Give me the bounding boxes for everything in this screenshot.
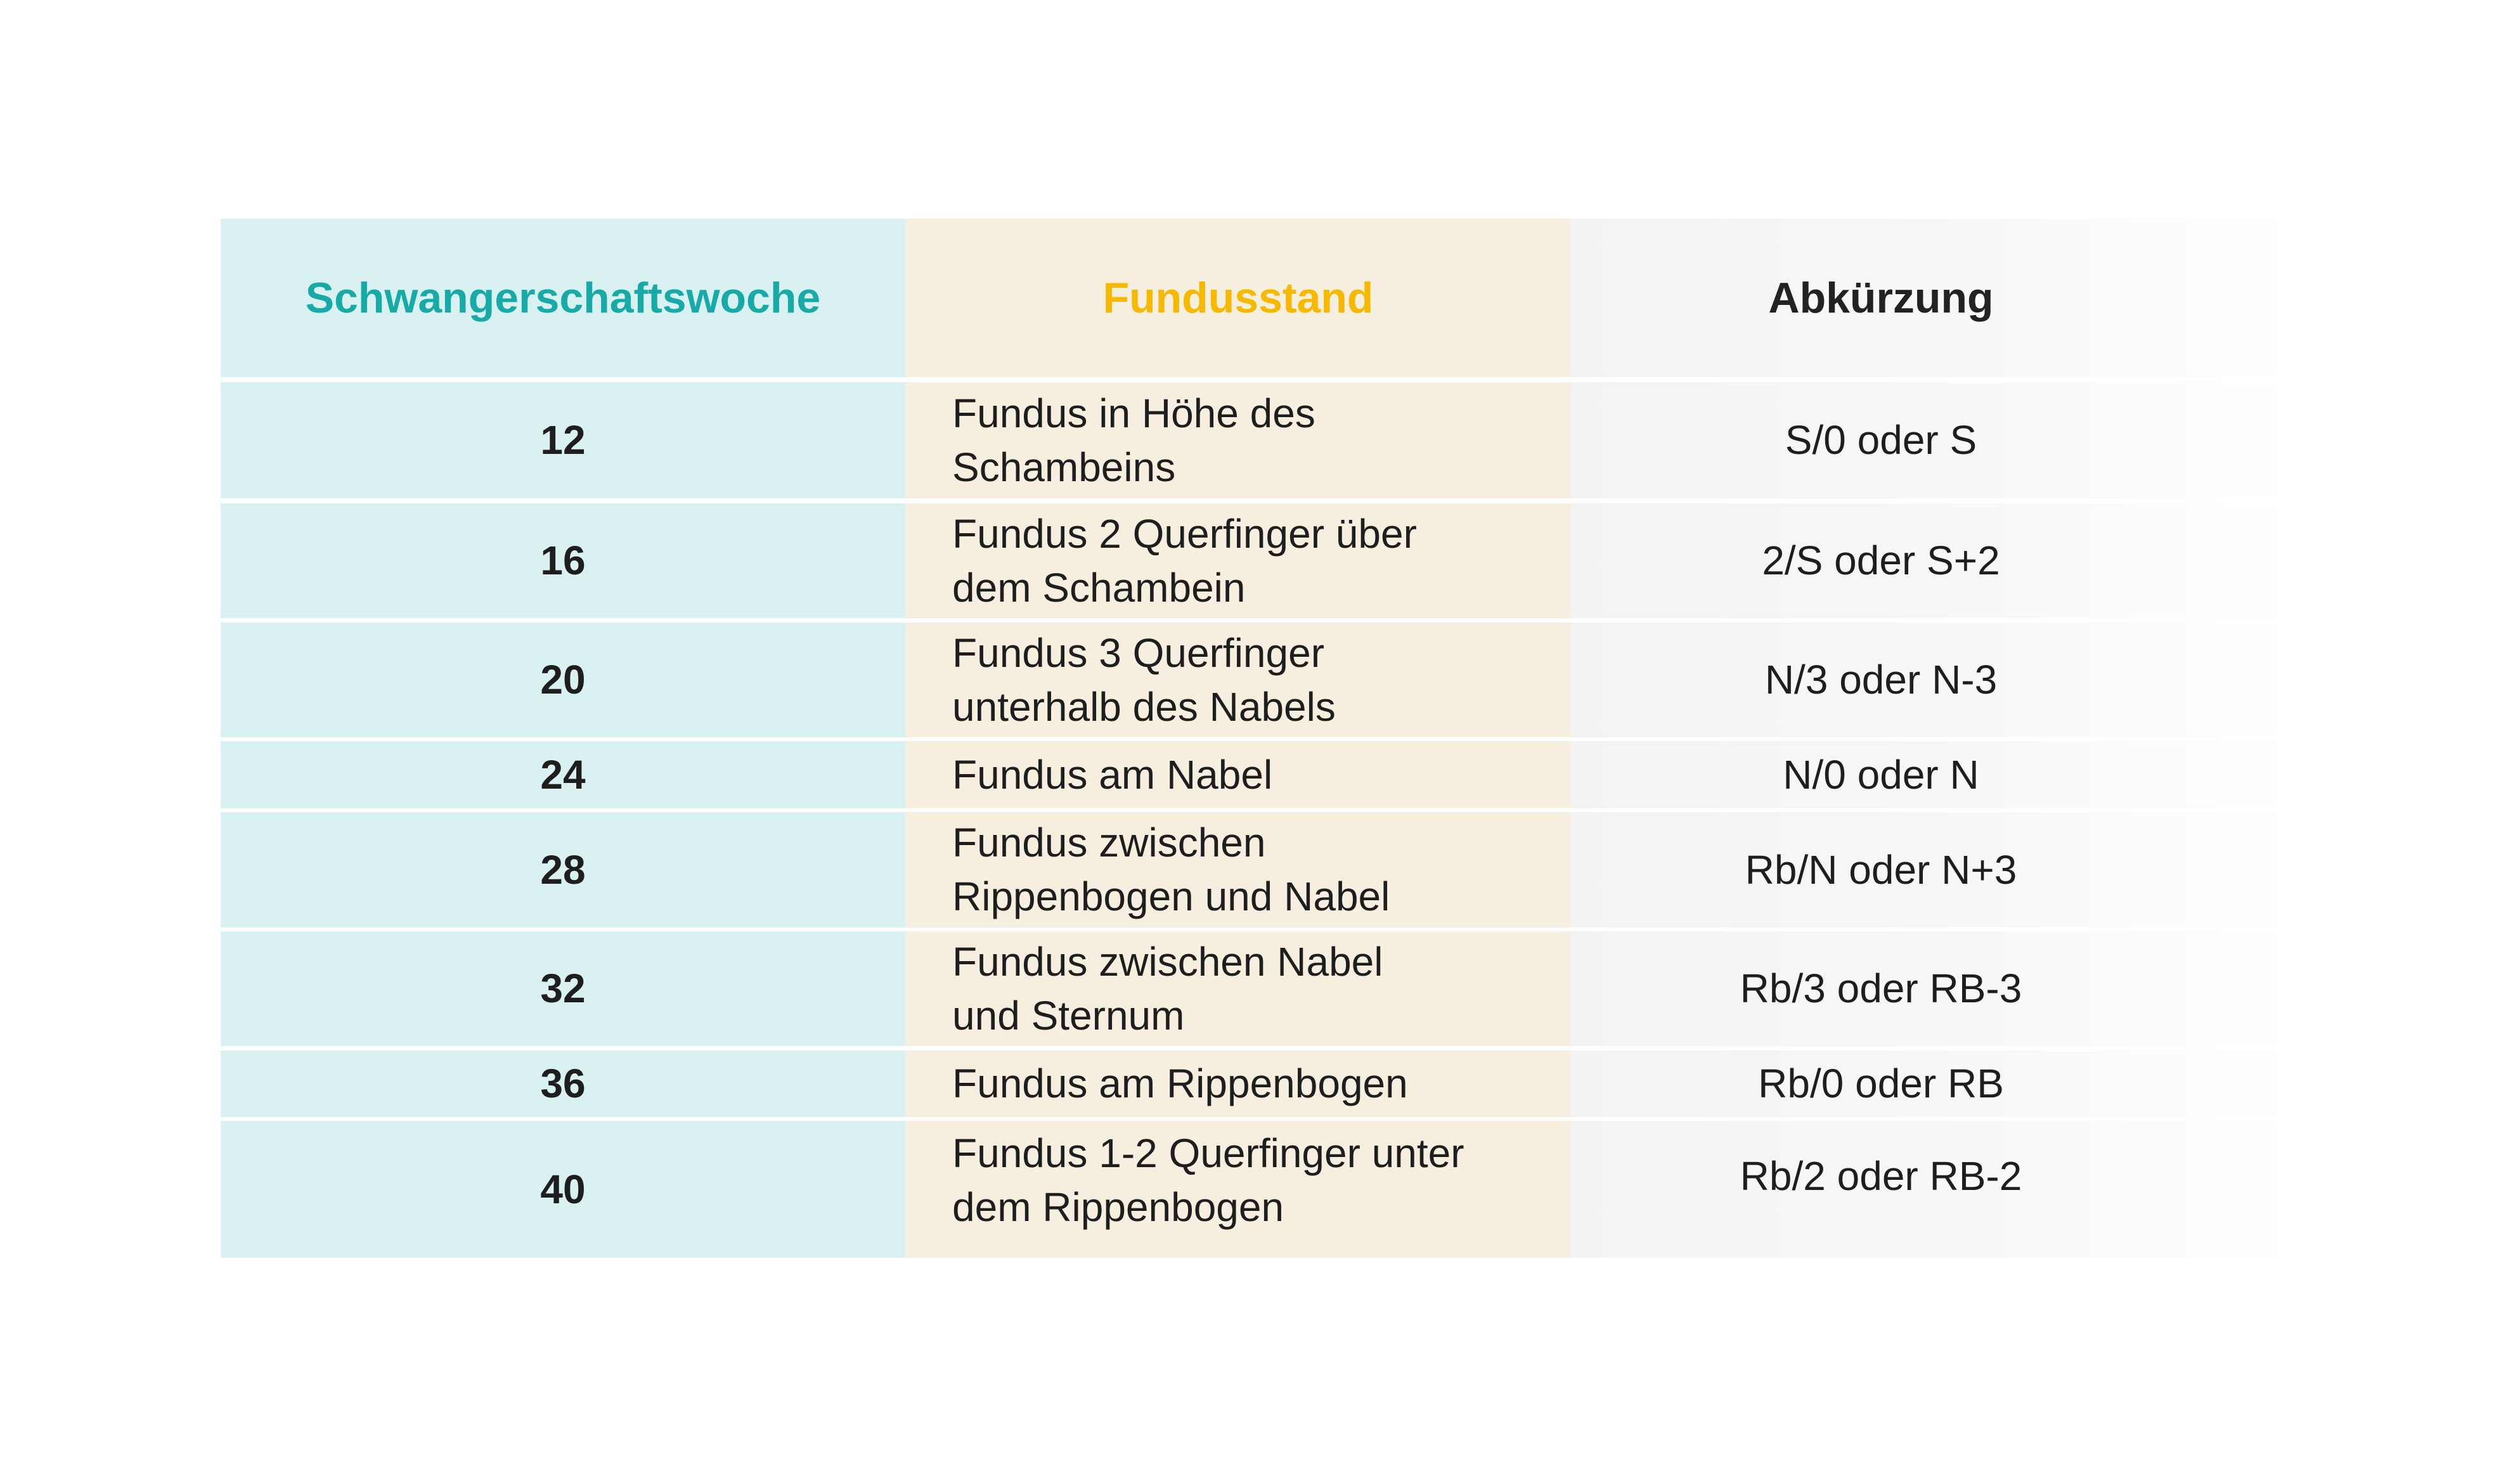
row 16: dem Schambein xyxy=(952,564,1245,610)
row 32: und Sternum xyxy=(952,993,1184,1038)
row 32 xyxy=(221,931,2022,1046)
row 16: 16 xyxy=(540,538,586,583)
row 28: Rippenbogen und Nabel xyxy=(952,874,1390,919)
row 20 xyxy=(221,623,1997,737)
row 36: Rb/0 oder RB xyxy=(1758,1061,2004,1106)
row 20: unterhalb des Nabels xyxy=(952,683,1336,729)
row 12: 12 xyxy=(540,417,586,463)
row 16: 2/S oder S+2 xyxy=(1762,538,2000,583)
header: Schwangerschaftswoche: Schwangerschaftswoche xyxy=(306,274,820,322)
row 40: dem Rippenbogen xyxy=(952,1184,1284,1230)
row 28: 28 xyxy=(540,847,586,893)
header: Fundusstand: Fundusstand xyxy=(1103,274,1373,322)
row 24: Fundus am Nabel xyxy=(952,752,1272,798)
header: Abkürzung: Abkürzung xyxy=(1768,274,1994,322)
row 36 xyxy=(221,1051,2004,1117)
header row xyxy=(221,219,1994,377)
table xyxy=(221,219,2022,1258)
row 20: 20 xyxy=(540,657,586,702)
row 32: 32 xyxy=(540,966,586,1011)
row 12: S/0 oder S xyxy=(1785,417,1977,463)
row 12: Fundus in Höhe des xyxy=(952,391,1315,436)
row 24 xyxy=(221,741,1979,808)
header: Fundusstand xyxy=(905,219,1571,377)
row 12 xyxy=(221,382,1977,498)
row 16: Fundus 2 Querfinger über xyxy=(952,511,1417,557)
row 36: Fundus am Rippenbogen xyxy=(952,1061,1408,1106)
row 32: Rb/3 oder RB-3 xyxy=(1740,966,2022,1011)
row 40: Rb/2 oder RB-2 xyxy=(1740,1153,2022,1199)
row 16 xyxy=(221,503,2000,618)
header: Abkürzung xyxy=(1571,219,2292,377)
header: Schwangerschaftswoche xyxy=(221,219,905,377)
row 20: N/3 oder N-3 xyxy=(1765,657,1997,702)
row 32: Fundus zwischen Nabel xyxy=(952,938,1383,984)
row 24: 24 xyxy=(540,752,586,798)
row 40 xyxy=(221,1121,2022,1258)
row 28: Fundus zwischen xyxy=(952,820,1265,865)
row 28 xyxy=(221,812,2017,928)
row 28: Rb/N oder N+3 xyxy=(1745,847,2017,893)
row 20: Fundus 3 Querfinger xyxy=(952,630,1324,676)
row 36: 36 xyxy=(540,1061,586,1106)
row 12: Schambeins xyxy=(952,444,1175,489)
row 40: Fundus 1-2 Querfinger unter xyxy=(952,1130,1464,1176)
row 24: N/0 oder N xyxy=(1783,752,1979,798)
row 40: 40 xyxy=(540,1167,586,1212)
